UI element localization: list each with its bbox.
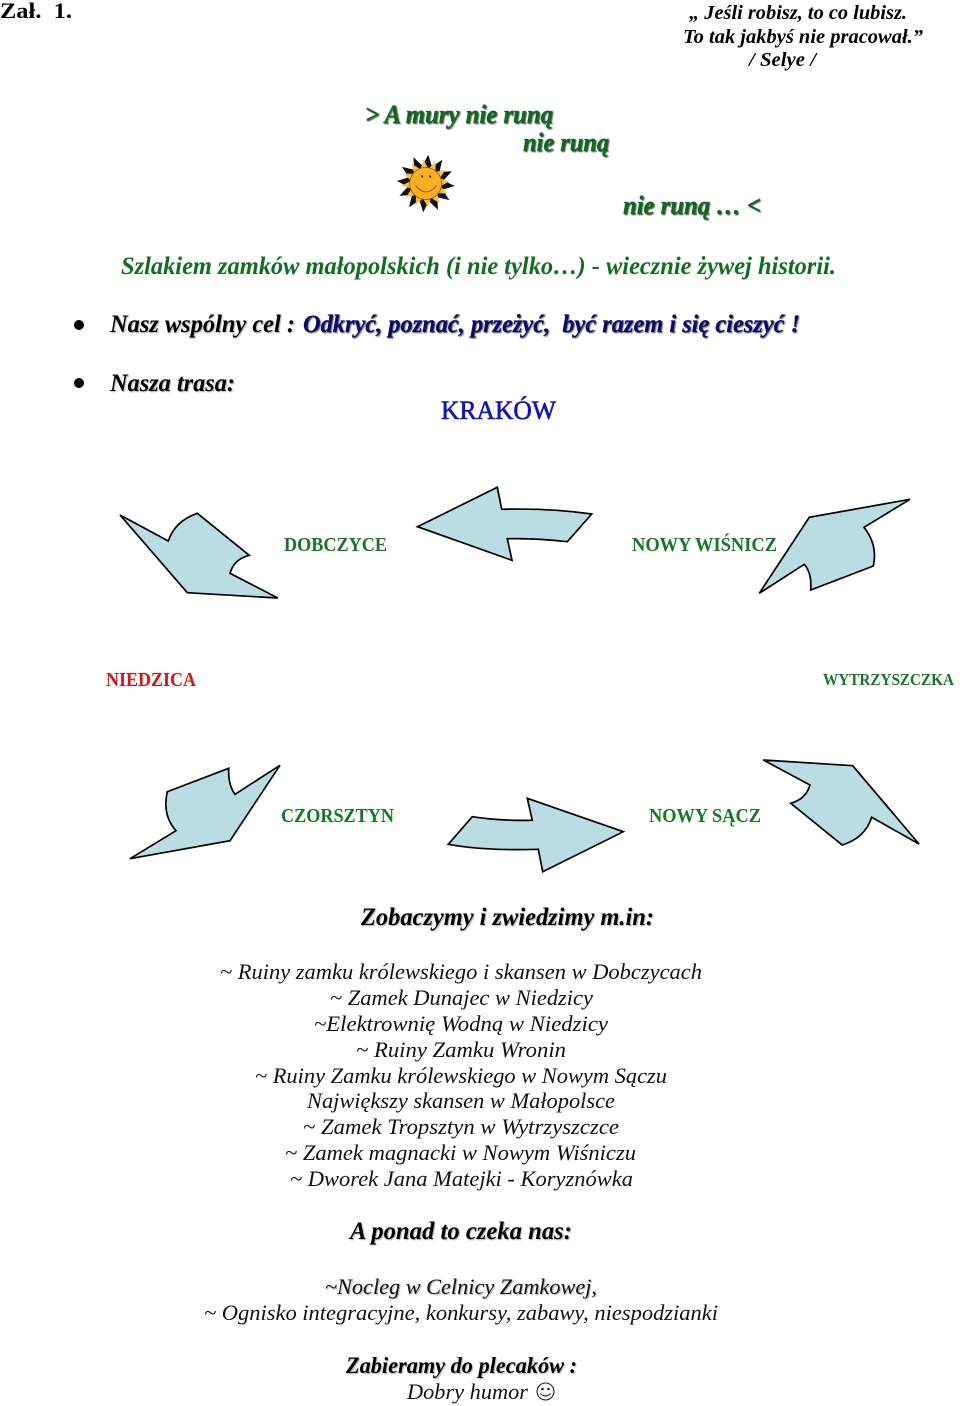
sight 6: Największy skansen w Małopolsce [306, 1088, 615, 1113]
heading: extras: A ponad to czeka nas: [348, 1216, 572, 1245]
bullet: goal [74, 311, 800, 338]
place: Czorsztyn: CZORSZTYN [281, 806, 394, 827]
packing item: Dobry humor [406, 1379, 528, 1404]
goal text: Odkryć, poznać, przeżyć, być razem i się cieszyć ! [303, 311, 800, 338]
sight 3: ~Elektrownię Wodną w Niedzicy [314, 1011, 608, 1036]
bullet: route [74, 370, 235, 397]
arrow: towards Dobczyce [418, 487, 592, 560]
quote author: / Selye / [747, 49, 818, 71]
heading: packing: Zabieramy do plecaków : [345, 1353, 577, 1379]
sight 9: ~ Dworek Jana Matejki - Koryznówka [290, 1166, 633, 1191]
arrow: towards Nowy Sącz [448, 798, 623, 872]
title line 2: nie runą [523, 128, 609, 157]
arrow: towards Kraków (right) [759, 499, 910, 593]
icon: smiley [537, 1383, 554, 1400]
sight 4: ~ Ruiny Zamku Wronin [356, 1037, 566, 1062]
quote line 2: To tak jakbyś nie pracował.” [683, 26, 923, 48]
sight 1: ~ Ruiny zamku królewskiego i skansen w Dobczycach [220, 959, 702, 984]
arrow: towards Wytrzyszczka [763, 760, 919, 845]
title [365, 100, 761, 220]
arrow: towards Niedzica (left) [120, 513, 278, 598]
title line 3: nie runą … < [623, 191, 761, 220]
place: Niedzica: NIEDZICA [106, 670, 196, 691]
extra 2: ~ Ognisko integracyjne, konkursy, zabawy, niespodzianki [204, 1300, 718, 1325]
route label: Nasza trasa: [109, 370, 235, 397]
extra 1: ~Nocleg w Celnicy Zamkowej, [325, 1274, 597, 1299]
list of sights [220, 959, 702, 1191]
heading: sights: Zobaczymy i zwiedzimy m.in: [360, 902, 654, 931]
goal label: Nasz wspólny cel : [109, 311, 295, 338]
quote line 1: „ Jeśli robisz, to co lubisz. [689, 2, 907, 24]
extras list [204, 1274, 718, 1325]
sight 7: ~ Zamek Tropsztyn w Wytrzyszczce [303, 1114, 619, 1139]
route start: Kraków: KRAKÓW [441, 396, 556, 425]
place: Dobczyce: DOBCZYCE [284, 535, 387, 556]
arrow: towards Czorsztyn [130, 765, 280, 859]
sight 2: ~ Zamek Dunajec w Niedzicy [330, 985, 593, 1010]
icon: smiling sun [394, 152, 457, 215]
place: Nowy Wiśnicz: NOWY WIŚNICZ [632, 534, 777, 556]
title line 1: > A mury nie runą [365, 100, 553, 129]
quote [683, 2, 923, 71]
sight 5: ~ Ruiny Zamku królewskiego w Nowym Sączu [255, 1063, 667, 1088]
sight 8: ~ Zamek magnacki w Nowym Wiśniczu [285, 1140, 636, 1165]
subtitle: Szlakiem zamków małopolskich (i nie tylko…) - wiecznie żywej historii. [121, 253, 836, 280]
place: Nowy Sącz: NOWY SĄCZ [649, 806, 761, 827]
